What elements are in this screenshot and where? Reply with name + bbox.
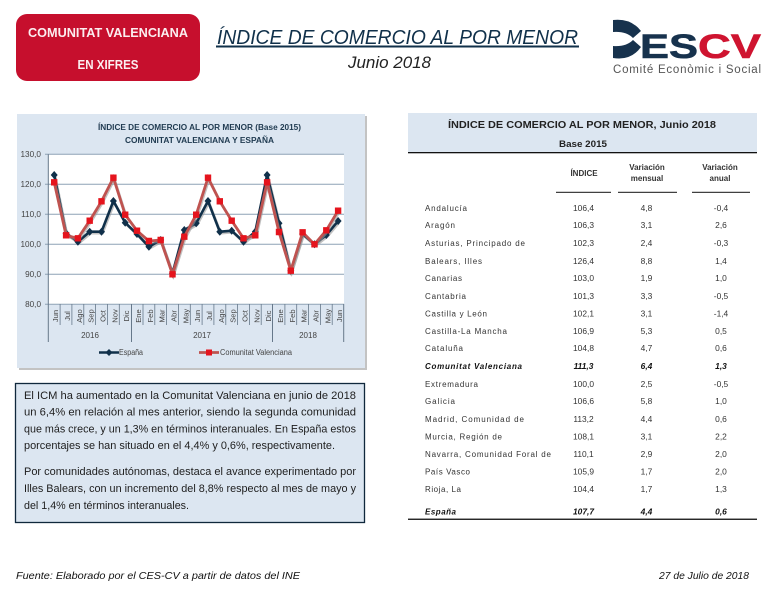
row: Cataluña xyxy=(425,343,727,353)
row: Extremadura xyxy=(425,379,729,389)
row: España: 107,7 xyxy=(573,506,594,516)
y axis labels: 130,0 xyxy=(20,150,41,159)
row: Cantabria: 101,3 xyxy=(573,291,594,301)
row: Cantabria xyxy=(425,291,729,301)
paragraph 2: Illes Balears, con un incremento del 8,8% respecto al mes de mayo y xyxy=(24,483,357,495)
row: Comunitat Valenciana: 6,4 xyxy=(641,361,653,371)
month labels: Nov xyxy=(110,309,119,323)
title: Junio 2018 xyxy=(347,54,432,72)
paragraph 1: que más crece, y un 1,3% en términos interanuales. En España estos xyxy=(24,424,356,436)
table heading: Base 2015 xyxy=(559,139,607,149)
month labels: Jun xyxy=(51,310,60,322)
month labels: Jun xyxy=(193,310,202,322)
paragraph 1: porcentajes se han situado en el 4,4% y 0,6%, respectivamente. xyxy=(24,440,335,452)
row: España: 4,4 xyxy=(640,506,653,516)
row: Castilla y León: -1,4 xyxy=(714,308,729,318)
source note: Fuente: Elaborado por el CES-CV a partir de datos del INE xyxy=(16,570,301,582)
title: ÍNDICE DE COMERCIO AL POR MENOR xyxy=(217,26,578,49)
row: Asturias: Asturias, Principado de xyxy=(425,239,526,248)
row: Balears: 126,4 xyxy=(573,256,594,266)
chart title xyxy=(98,122,301,145)
month labels: Ene xyxy=(134,309,143,323)
row: Madrid: 113,2 xyxy=(573,414,594,424)
row: Murcia: 3,1 xyxy=(641,432,653,442)
row: Navarra: 2,0 xyxy=(715,449,727,459)
row: Castilla y León xyxy=(425,308,729,318)
row: Galicia: 1,0 xyxy=(715,396,727,406)
row: Rioja: Rioja, La xyxy=(425,485,462,494)
row: España: 0,6 xyxy=(715,506,727,516)
row: Navarra: 110,1 xyxy=(573,449,594,459)
paragraph 1: El ICM ha aumentado en la Comunitat Valenciana en junio de 2018 xyxy=(24,390,356,402)
row: Murcia: Murcia, Región de xyxy=(425,432,503,442)
month labels: Nov xyxy=(252,309,261,323)
month labels: Mar xyxy=(299,309,308,323)
row: Madrid: 4,4 xyxy=(641,414,653,424)
row: Canarias: 1,0 xyxy=(715,273,727,283)
row: Cantabria: 3,3 xyxy=(641,291,653,301)
row: España xyxy=(425,506,727,516)
row: Castilla y León: 102,1 xyxy=(573,308,594,318)
month labels: Sep xyxy=(228,309,237,323)
row: Cataluña: 0,6 xyxy=(715,343,727,353)
row: Cantabria: -0,5 xyxy=(714,291,729,301)
row: Asturias: -0,3 xyxy=(714,238,729,248)
row: Madrid: 0,6 xyxy=(715,414,727,424)
row: País Vasco: País Vasco xyxy=(425,468,471,476)
row: Cataluña: Cataluña xyxy=(425,344,464,353)
row: Cataluña: 104,8 xyxy=(573,343,594,353)
logo: CES-CV: Comité Econòmic i Social xyxy=(613,64,761,76)
row: País Vasco: 105,9 xyxy=(573,466,594,476)
chart title: ÍNDICE DE COMERCIO AL POR MENOR (Base 2015) xyxy=(98,122,301,132)
row: Murcia: 108,1 xyxy=(573,432,594,442)
y axis labels: 100,0 xyxy=(20,240,41,249)
row: Aragón: Aragón xyxy=(425,221,455,230)
row: Murcia xyxy=(425,432,727,442)
y axis labels xyxy=(20,150,41,309)
month labels: May xyxy=(323,309,332,323)
row: Asturias xyxy=(425,238,729,248)
row: Canarias xyxy=(425,273,727,283)
row: Comunitat Valenciana: Comunitat Valenciana xyxy=(425,362,523,371)
month labels: Dic xyxy=(122,310,131,321)
row: Castilla-La Mancha: 5,3 xyxy=(641,326,653,336)
month labels xyxy=(51,309,344,323)
month labels: Ene xyxy=(276,309,285,323)
row: Madrid: Madrid, Comunidad de xyxy=(425,415,525,424)
row: Galicia: Galicia xyxy=(425,397,456,406)
row: Castilla y León: Castilla y León xyxy=(425,310,487,318)
row: Cantabria: Cantabria xyxy=(425,292,467,301)
paragraph 2 xyxy=(24,466,357,512)
paragraph 2: Por comunidades autónomas, destaca el avance experimentado por xyxy=(24,466,356,478)
row: Navarra: Navarra, Comunidad Foral de xyxy=(425,450,552,459)
row: Rioja: 1,3 xyxy=(715,484,727,494)
row: Balears xyxy=(425,256,727,266)
year labels: 2016 xyxy=(81,331,99,340)
title xyxy=(216,26,579,72)
year labels: 2017 xyxy=(193,331,211,340)
row: Castilla y León: 3,1 xyxy=(641,308,653,318)
logo: CES-CV: ES xyxy=(640,28,698,66)
logo: CES-CV: CV xyxy=(698,28,761,66)
row: Galicia: 106,6 xyxy=(573,396,594,406)
panel: line chart xyxy=(17,114,367,370)
row: Andalucía: 106,4 xyxy=(573,203,594,213)
row: Andalucía: -0,4 xyxy=(714,203,729,213)
row: Aragón: 3,1 xyxy=(641,220,653,230)
row: Cataluña: 4,7 xyxy=(641,343,653,353)
row: Castilla-La Mancha: 0,5 xyxy=(715,326,727,336)
series: España xyxy=(51,171,342,277)
row: Navarra: 2,9 xyxy=(641,449,653,459)
row: Galicia: 5,8 xyxy=(641,396,653,406)
paragraph 2: del 1,4% en términos interanuales. xyxy=(24,500,189,512)
row: Extremadura: -0,5 xyxy=(714,379,729,389)
logo: CES-CV xyxy=(613,20,761,76)
panel: data table xyxy=(408,113,757,520)
row: Canarias: Canarias xyxy=(425,274,462,283)
month labels: Feb xyxy=(288,309,297,323)
month labels: Jul xyxy=(63,311,72,321)
y axis labels: 80,0 xyxy=(25,300,41,309)
chart title: COMUNITAT VALENCIANA Y ESPAÑA xyxy=(125,135,274,145)
paragraph 1 xyxy=(24,390,356,452)
month labels: Jun xyxy=(335,310,344,322)
panel: summary text xyxy=(16,384,364,522)
month labels: Feb xyxy=(146,309,155,323)
paragraph 1: un 6,4% en relación al mes anterior, siendo la segunda comunidad xyxy=(24,406,356,418)
row: Aragón: 2,6 xyxy=(715,220,727,230)
row: Asturias: 2,4 xyxy=(641,238,653,248)
row: Canarias: 1,9 xyxy=(641,273,653,283)
table heading: ÍNDICE DE COMERCIO AL POR MENOR, Junio 2018 xyxy=(448,118,716,131)
row: Asturias: 102,3 xyxy=(573,238,594,248)
row: Rioja xyxy=(425,484,727,494)
column headers: mensual xyxy=(631,174,663,183)
row: Comunitat Valenciana: 1,3 xyxy=(715,361,727,371)
y axis labels: 120,0 xyxy=(20,180,41,189)
month labels: Abr xyxy=(311,310,320,322)
row: Andalucía: Andalucía xyxy=(425,204,468,213)
y axis labels: 110,0 xyxy=(21,210,41,219)
row: Andalucía: 4,8 xyxy=(641,203,653,213)
row: Rioja: 104,4 xyxy=(573,484,594,494)
column headers: Variación xyxy=(702,163,738,172)
month labels: Abr xyxy=(169,310,178,322)
legend: España xyxy=(119,348,144,357)
badge: Comunitat Valenciana en xifres xyxy=(16,14,200,81)
legend: Comunitat Valenciana xyxy=(220,348,293,357)
row: Extremadura: Extremadura xyxy=(425,380,479,389)
month labels: Oct xyxy=(98,309,107,322)
month labels: Oct xyxy=(240,309,249,322)
row: Balears: 1,4 xyxy=(715,256,727,266)
month labels: May xyxy=(181,309,190,323)
y axis labels: 90,0 xyxy=(25,270,41,279)
month labels: Ago xyxy=(75,309,84,323)
month labels: Jul xyxy=(205,311,214,321)
row: Murcia: 2,2 xyxy=(715,432,727,442)
badge: Comunitat Valenciana en xifres: COMUNITAT VALENCIANA xyxy=(28,26,188,40)
month labels: Mar xyxy=(157,309,166,323)
month labels: Ago xyxy=(217,309,226,323)
date: 27 de Julio de 2018 xyxy=(658,570,749,582)
row: Extremadura: 100,0 xyxy=(573,379,594,389)
legend xyxy=(99,348,293,357)
month labels: Dic xyxy=(264,310,273,321)
column headers: anual xyxy=(710,174,730,183)
row: País Vasco xyxy=(425,466,727,476)
year labels: 2018 xyxy=(299,331,317,340)
row: Madrid xyxy=(425,414,727,424)
row: España: España xyxy=(425,508,457,516)
row: Aragón: 106,3 xyxy=(573,220,594,230)
row: Aragón xyxy=(425,220,727,230)
row: Comunitat Valenciana xyxy=(425,361,727,371)
column headers: ÍNDICE xyxy=(570,169,598,178)
row: Extremadura: 2,5 xyxy=(641,379,653,389)
row: Balears: Balears, Illes xyxy=(425,257,482,266)
row: Comunitat Valenciana: 111,3 xyxy=(574,361,594,371)
row: Andalucía xyxy=(425,203,729,213)
row: Castilla-La Mancha xyxy=(425,326,727,336)
row: Galicia xyxy=(425,396,727,406)
series: Comunitat Valenciana xyxy=(51,174,341,278)
badge: Comunitat Valenciana en xifres: EN XIFRES xyxy=(78,58,138,72)
row: Castilla-La Mancha: 106,9 xyxy=(573,326,594,336)
row: País Vasco: 1,7 xyxy=(641,466,653,476)
column headers xyxy=(556,163,750,193)
row: Castilla-La Mancha: Castilla-La Mancha xyxy=(425,327,508,336)
table heading xyxy=(408,113,757,153)
row: Rioja: 1,7 xyxy=(641,484,653,494)
row: Canarias: 103,0 xyxy=(573,273,594,283)
year labels xyxy=(81,331,317,340)
month labels: Sep xyxy=(86,309,95,323)
column headers: Variación xyxy=(629,163,665,172)
row: Navarra xyxy=(425,449,727,459)
row: País Vasco: 2,0 xyxy=(715,466,727,476)
row: Balears: 8,8 xyxy=(641,256,653,266)
